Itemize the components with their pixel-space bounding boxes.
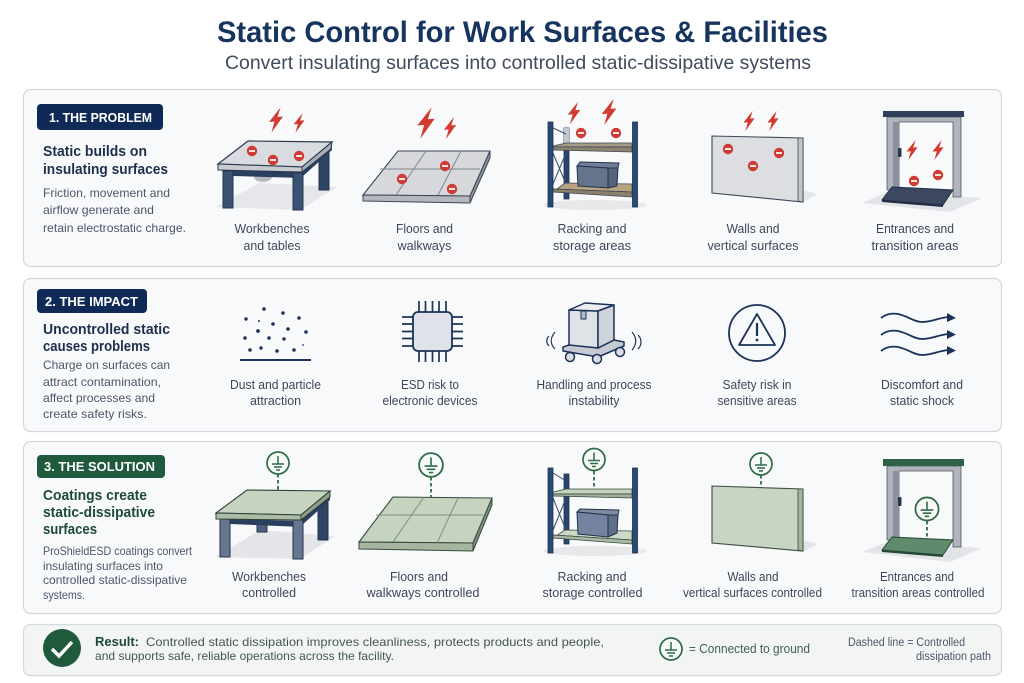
- label: floors controlled: [365, 570, 480, 600]
- label: walls: Walls and: [726, 222, 780, 236]
- badge: the impact: [37, 289, 147, 313]
- label: handling: [536, 378, 652, 408]
- label: workbenches controlled: controlled: [242, 586, 296, 600]
- result text: [95, 634, 604, 663]
- body text: impact: create safety risks.: [43, 407, 147, 421]
- label: floors: walkways: [396, 239, 452, 253]
- result text: Result:: [95, 634, 139, 649]
- result text: and supports safe, reliable operations across the facility.: [95, 649, 394, 663]
- body text: solution: insulating surfaces into: [43, 559, 163, 573]
- icon: charged floor: [363, 107, 490, 203]
- label: workbenches: and tables: [244, 239, 300, 253]
- label: entrances controlled: Entrances and: [880, 570, 954, 584]
- label: esd risk: ESD risk to: [401, 378, 459, 392]
- badge: the solution: 3. THE SOLUTION: [44, 460, 155, 474]
- subtitle: Convert insulating surfaces into controlled static-dissipative systems: [225, 52, 811, 74]
- label: safety: [718, 378, 796, 408]
- label: racking: storage areas: [553, 239, 631, 253]
- legend: ground symbol: = Connected to ground: [689, 641, 810, 656]
- label: discomfort: Discomfort and: [881, 378, 963, 392]
- label: walls: [708, 222, 798, 253]
- body text: solution: ProShieldESD coatings convert: [43, 544, 193, 558]
- icon: unstable cart: [547, 303, 641, 364]
- heading: coatings: static-dissipative: [43, 504, 155, 521]
- label: walls controlled: [683, 570, 822, 600]
- heading: static builds: [43, 143, 168, 178]
- label: workbenches controlled: [232, 570, 306, 600]
- label: racking controlled: Racking and: [558, 570, 627, 584]
- label: entrances controlled: transition areas controlled: [852, 586, 985, 600]
- icon: charged racking: [543, 99, 647, 210]
- heading: coatings: surfaces: [43, 521, 97, 538]
- panel: the solution: [24, 442, 1002, 614]
- label: discomfort: static shock: [890, 394, 955, 408]
- panel: the problem: [24, 90, 1002, 266]
- icon: airflow arrows: [881, 313, 956, 355]
- label: dust: Dust and particle: [230, 378, 321, 392]
- badge: the impact: 2. THE IMPACT: [45, 295, 138, 309]
- label: entrances: transition areas: [872, 239, 958, 253]
- label: entrances: [872, 222, 958, 253]
- label: handling: Handling and process: [536, 378, 652, 392]
- label: workbenches controlled: Workbenches: [232, 570, 306, 584]
- panel: the impact: [24, 278, 1002, 432]
- legend: dashed line: [848, 637, 991, 663]
- label: walls: vertical surfaces: [708, 239, 798, 253]
- icon: charged wall: [712, 111, 818, 202]
- title: Static Control for Work Surfaces & Facilities: [217, 16, 828, 49]
- body text: impact: attract contamination,: [43, 375, 161, 389]
- body text: impact: Charge on surfaces can: [43, 358, 170, 372]
- body text: solution: controlled static-dissipative: [43, 573, 187, 587]
- icon: charged entrance: [862, 111, 982, 212]
- icon: grounded racking: [543, 448, 647, 556]
- label: walls controlled: Walls and: [728, 570, 779, 584]
- icon: microchip: [402, 301, 463, 362]
- body text: problem: Friction, movement and: [43, 186, 170, 200]
- body text: problem: [43, 186, 186, 235]
- label: dust: [230, 378, 321, 408]
- icon: grounded entrance: [862, 459, 982, 562]
- label: safety: sensitive areas: [718, 394, 796, 408]
- badge: the solution: [37, 455, 165, 478]
- label: racking controlled: [542, 570, 643, 600]
- label: dust: attraction: [250, 394, 301, 408]
- label: handling: instability: [568, 394, 620, 408]
- label: esd risk: [382, 378, 478, 408]
- label: entrances controlled: [852, 570, 985, 600]
- legend: dashed line: dissipation path: [916, 651, 991, 663]
- heading: static builds: Static builds on: [43, 143, 147, 160]
- label: racking controlled: storage controlled: [542, 586, 643, 600]
- heading: coatings: [43, 487, 155, 538]
- heading: coatings: Coatings create: [43, 487, 147, 504]
- icon: grounded workbench: [215, 452, 335, 559]
- icon: charged workbench: [215, 108, 337, 210]
- body text: solution: systems.: [43, 588, 85, 602]
- icon: dust particles: [240, 307, 311, 361]
- label: esd risk: electronic devices: [382, 394, 478, 408]
- legend: dashed line: Dashed line = Controlled: [848, 637, 965, 649]
- label: safety: Safety risk in: [722, 378, 792, 392]
- result text: Controlled static dissipation improves cleanliness, protects products and people,: [146, 635, 604, 649]
- legend: ground symbol: [660, 638, 810, 660]
- label: entrances: Entrances and: [876, 222, 954, 236]
- label: racking: Racking and: [558, 222, 627, 236]
- body text: impact: [43, 358, 170, 421]
- label: floors controlled: Floors and: [390, 570, 448, 584]
- heading: uncontrolled static: [43, 321, 170, 355]
- badge: the problem: 1. THE PROBLEM: [49, 111, 152, 125]
- panel: result bar: [24, 624, 1002, 676]
- body text: solution: [43, 544, 193, 602]
- label: discomfort: [881, 378, 963, 408]
- label: workbenches: [234, 222, 310, 253]
- body text: impact: affect processes and: [43, 391, 155, 405]
- heading: static builds: insulating surfaces: [43, 161, 168, 178]
- label: workbenches: Workbenches: [234, 222, 310, 236]
- label: floors: [396, 222, 453, 253]
- icon: grounded floor: [359, 453, 492, 551]
- badge: the problem: [37, 104, 163, 130]
- label: walls controlled: vertical surfaces controlled: [683, 586, 822, 600]
- heading: uncontrolled static: Uncontrolled static: [43, 321, 170, 338]
- body text: problem: airflow generate and: [43, 203, 154, 217]
- icon: grounded wall: [712, 453, 818, 552]
- body text: problem: retain electrostatic charge.: [43, 221, 186, 235]
- label: racking: [553, 222, 631, 253]
- heading: uncontrolled static: causes problems: [43, 338, 150, 355]
- icon: safety warning: [729, 305, 785, 361]
- label: floors controlled: walkways controlled: [365, 586, 480, 600]
- label: floors: Floors and: [396, 222, 453, 236]
- icon: check mark: [43, 629, 81, 667]
